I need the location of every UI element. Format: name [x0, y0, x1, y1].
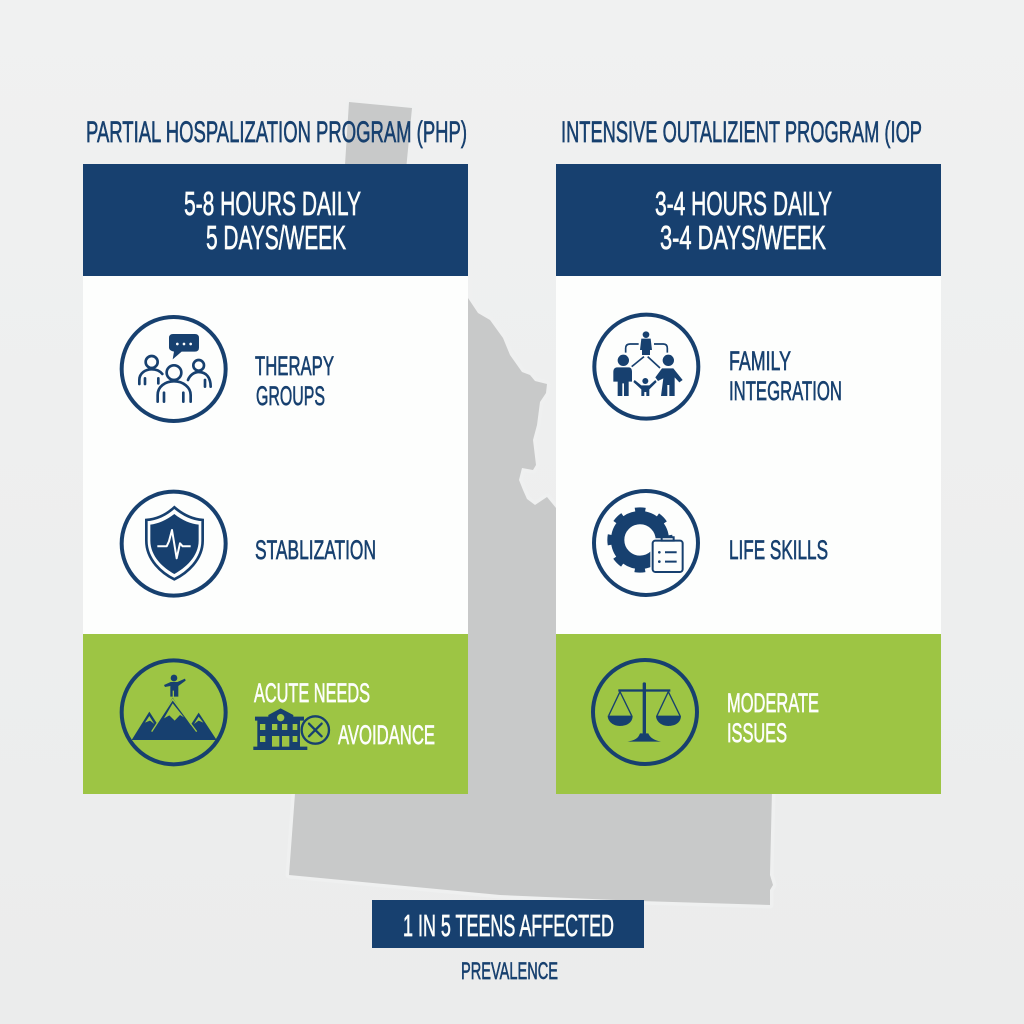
icon: shield — [122, 492, 226, 596]
callout: prevalence stat: 1 IN 5 TEENS AFFECTED — [403, 908, 614, 943]
label: family integration: INTEGRATION — [729, 376, 842, 406]
icon: gear and clipboard — [594, 491, 698, 595]
panel: PHP — [83, 164, 468, 794]
PHP schedule header: 5-8 HOURS DAILY — [184, 185, 361, 222]
label: acute needs: ACUTE NEEDS — [254, 678, 370, 708]
IOP green band — [556, 634, 941, 794]
IOP schedule header: 3-4 DAYS/WEEK — [660, 219, 826, 256]
PHP schedule header — [83, 164, 468, 276]
PHP panel white body — [83, 276, 468, 634]
icon: hospital avoided — [253, 708, 329, 750]
IOP panel white body — [556, 276, 941, 634]
PHP schedule header: 5 DAYS/WEEK — [206, 219, 346, 256]
state map silhouette — [289, 102, 773, 905]
label: stabilization: STABLIZATION — [255, 535, 376, 565]
label: moderate issues: MODERATE — [727, 688, 819, 718]
label: life skills: LIFE SKILLS — [729, 535, 828, 565]
label: prevalence: PREVALENCE — [461, 958, 558, 985]
callout: prevalence stat — [372, 900, 644, 948]
label: avoidance: AVOIDANCE — [338, 720, 435, 750]
label: therapy groups — [255, 351, 334, 411]
IOP schedule header: 3-4 HOURS DAILY — [655, 185, 832, 222]
label: family integration — [729, 346, 842, 406]
label: therapy groups: GROUPS — [256, 381, 325, 411]
heading: PHP: PARTIAL HOSPALIZATION PROGRAM (PHP) — [86, 116, 467, 149]
label: family integration: FAMILY — [729, 346, 791, 376]
label: moderate issues — [727, 688, 819, 748]
icon: balance scales — [593, 660, 697, 764]
label: therapy groups: THERAPY — [255, 351, 334, 381]
icon: family — [594, 315, 698, 419]
icon: mountain summit — [122, 660, 226, 764]
icon: therapy group — [122, 317, 226, 421]
panel: IOP — [556, 164, 941, 794]
label: moderate issues: ISSUES — [727, 718, 787, 748]
IOP schedule header — [556, 164, 941, 276]
PHP green band — [83, 634, 468, 794]
